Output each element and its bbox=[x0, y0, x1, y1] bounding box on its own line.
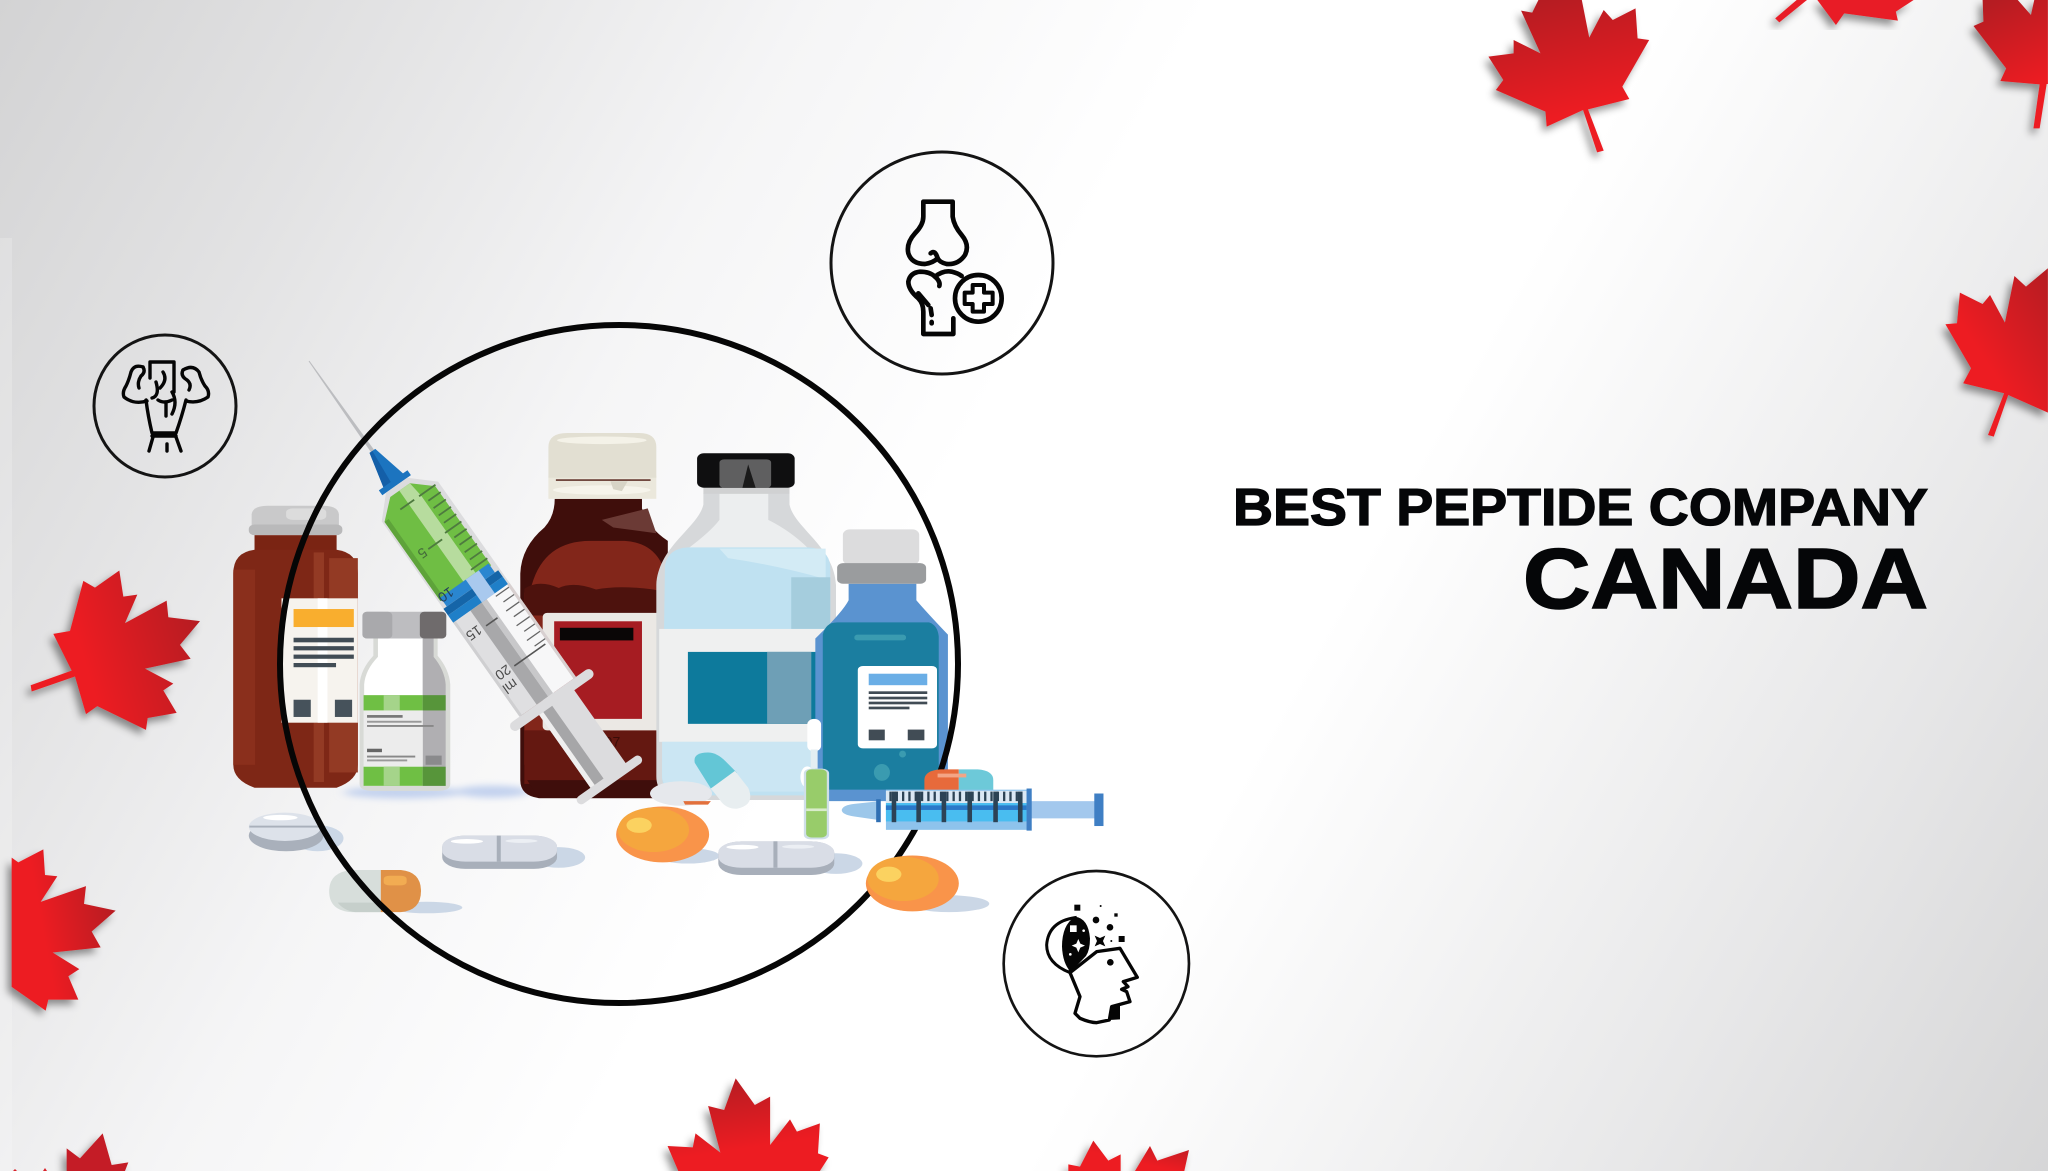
maple leaf: lower left bbox=[12, 849, 116, 1011]
maple leaf: top right bbox=[1974, 0, 2048, 128]
large ring bbox=[280, 325, 958, 1003]
bottles and pills in front of syringe bbox=[249, 453, 948, 912]
scale numbers: 15 bbox=[463, 622, 485, 644]
title: canada: CANADA bbox=[1523, 532, 1928, 627]
main syringe with green fill bbox=[271, 330, 652, 813]
medicine illustration, behind the ring bbox=[233, 433, 989, 913]
round tablet bbox=[249, 813, 323, 851]
illustration elements in front of ring bbox=[842, 769, 1103, 911]
barrel bbox=[370, 464, 576, 717]
small vial with green label bbox=[360, 612, 450, 791]
maple leaf: bottom centre bbox=[668, 1078, 829, 1171]
capsule: orange and teal bbox=[924, 769, 993, 792]
glass bottle with teal label bbox=[656, 453, 836, 800]
brown bottle bbox=[233, 506, 358, 788]
finger flange bbox=[508, 667, 596, 733]
plunger end bbox=[575, 754, 644, 806]
maple leaf: bottom left bbox=[67, 1133, 128, 1171]
orange softgel: right bbox=[866, 855, 959, 911]
green liquid bbox=[375, 472, 491, 601]
orange softgel: centre bbox=[616, 807, 709, 862]
stopper bbox=[437, 561, 508, 623]
green highlight bbox=[399, 482, 477, 584]
maple leaf: top middle bbox=[1775, 0, 1914, 25]
title: best peptide company: BEST PEPTIDE COMPANY bbox=[1233, 479, 1928, 537]
maple leaf: top bbox=[1488, 0, 1649, 152]
ampoule bbox=[800, 719, 829, 839]
circle icon: head and mind bbox=[1004, 871, 1189, 1056]
dark red bottle: 97 bbox=[605, 733, 620, 749]
maple leaf: bottom left tips bbox=[13, 1168, 47, 1171]
green scale ticks bbox=[419, 485, 487, 570]
capsule: grey and orange bbox=[329, 870, 421, 912]
vial soft shadows bbox=[344, 785, 530, 798]
scale numbers: 20 bbox=[492, 662, 514, 684]
green left shade bbox=[385, 519, 445, 601]
dark red bottle bbox=[520, 433, 668, 798]
plunger rod bbox=[538, 689, 626, 789]
small tablet behind bottle bbox=[650, 781, 712, 806]
teal and white capsule bbox=[694, 753, 750, 809]
maple leaf: right bbox=[1945, 268, 2048, 437]
needle bbox=[307, 360, 375, 454]
scale numbers: 10 bbox=[435, 584, 457, 606]
circle icon: muscle bbox=[94, 335, 236, 477]
left edge strip bbox=[0, 238, 12, 1171]
scored tablet: right bbox=[718, 841, 834, 875]
long scale ticks bbox=[400, 500, 442, 549]
muscular torso bbox=[123, 362, 209, 451]
lower barrel bbox=[453, 583, 576, 717]
bone joint outline bbox=[908, 202, 1002, 334]
scale numbers: 5 bbox=[415, 544, 430, 562]
circle icon: joint bbox=[831, 152, 1053, 374]
scale numbers: ml bbox=[500, 676, 521, 697]
scale numbers bbox=[407, 544, 523, 698]
maple leaf: left bbox=[31, 571, 200, 730]
pill shadows bbox=[292, 825, 989, 913]
open head with brain bbox=[1047, 905, 1137, 1023]
small blue syringe bbox=[842, 789, 1103, 831]
hub bbox=[358, 441, 411, 495]
blue bottle bbox=[815, 529, 948, 801]
maple leaf: bottom middle bbox=[1068, 1141, 1189, 1171]
scored tablet: left bbox=[442, 836, 557, 869]
